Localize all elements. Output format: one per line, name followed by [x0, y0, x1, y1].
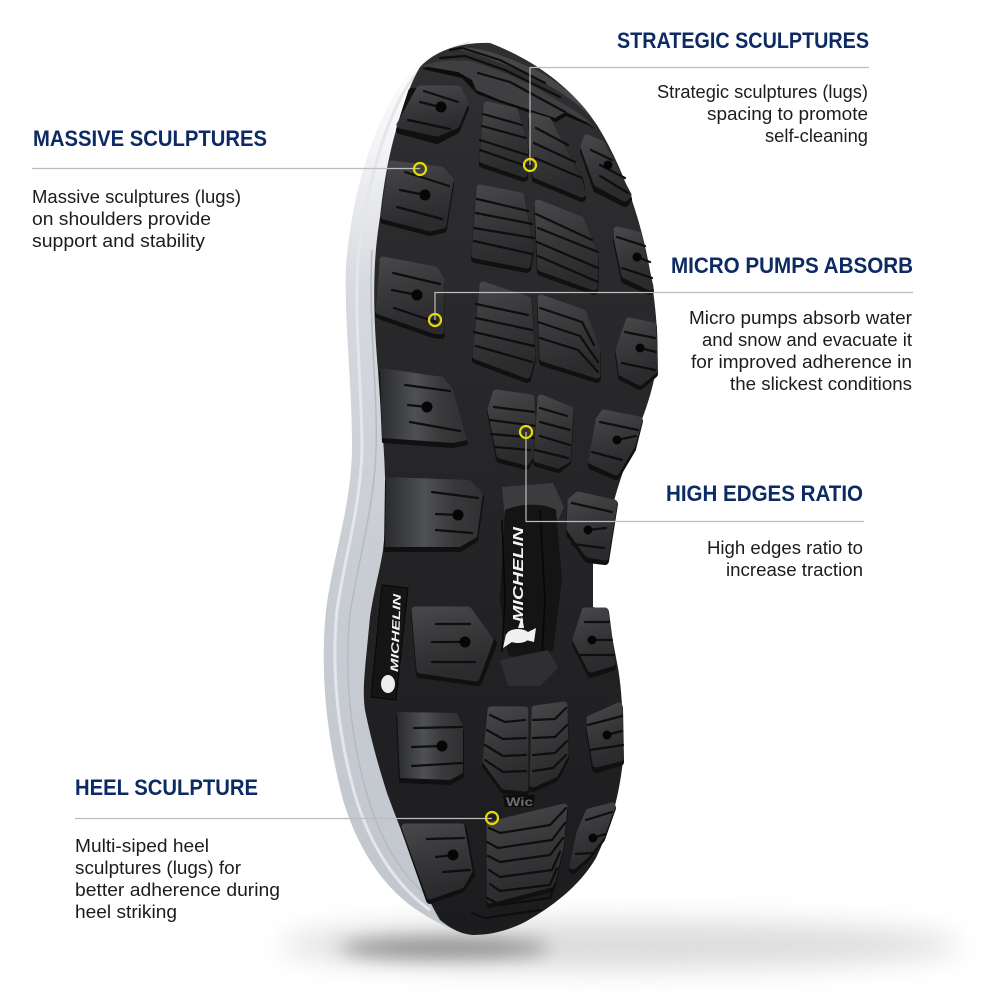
block row 5: [485, 705, 567, 792]
text block: support and stability: [32, 231, 205, 251]
lug R1: [584, 138, 628, 203]
lug R5: [570, 495, 614, 561]
text block: on shoulders provide: [32, 209, 211, 229]
leader line and marker: massive sculptures: [32, 163, 426, 175]
lug L8: [405, 827, 471, 900]
heading: HEEL SCULPTURE: [75, 775, 258, 800]
leader line and marker: micro pumps: [429, 292, 913, 326]
small side label: MICHELIN: [389, 592, 404, 672]
text block: Massive sculptures (lugs): [32, 187, 241, 207]
text block: the slickest conditions: [730, 374, 912, 394]
wic mark: [503, 795, 535, 809]
text block: [707, 538, 863, 580]
lug R6: [576, 611, 614, 674]
forefoot central blocks: [474, 105, 598, 379]
arch logo text: MICHELIN: [510, 525, 527, 622]
text block: High edges ratio to: [707, 538, 863, 558]
arch logo recess: [500, 505, 562, 662]
callout: high edges ratio: [666, 481, 863, 580]
heading: MASSIVE SCULPTURES: [33, 126, 267, 151]
text block: spacing to promote: [707, 104, 868, 124]
callout: heel sculpture: [75, 775, 280, 922]
midfoot central blocks: [371, 393, 570, 700]
callout: micro pumps absorb: [671, 253, 913, 394]
text block: and snow and evacuate it: [702, 330, 912, 350]
lug R7: [588, 706, 623, 769]
callout: strategic sculptures: [617, 28, 869, 146]
lug L2: [384, 164, 450, 232]
block row 3: [474, 285, 598, 379]
heading: STRATEGIC SCULPTURES: [617, 28, 869, 53]
lug R2: [617, 230, 652, 291]
ground shadow: [280, 921, 960, 969]
heel block: [472, 807, 566, 918]
text block: [32, 187, 241, 251]
centre tongue: [502, 483, 564, 520]
toe band: [422, 48, 595, 130]
lug R4: [592, 413, 639, 476]
text block: for improved adherence in: [691, 352, 912, 372]
block row 1: [480, 105, 582, 198]
text block: Multi-siped heel: [75, 836, 209, 856]
lug L3: [379, 260, 441, 335]
lug R3: [619, 321, 656, 386]
text block: self-cleaning: [765, 126, 868, 146]
text block: heel striking: [75, 902, 177, 922]
text block: [657, 82, 868, 146]
lower arch pad: [500, 650, 558, 686]
left shoulder lugs: [379, 89, 493, 900]
lug L6: [415, 610, 493, 682]
heading: MICRO PUMPS ABSORB: [671, 253, 913, 278]
leader line and marker: strategic sculptures: [524, 68, 869, 171]
lug L4: [380, 368, 467, 447]
leader line and marker: high edges: [520, 426, 864, 522]
block row 4: [490, 393, 570, 469]
heel central blocks: [472, 705, 567, 918]
lug R8: [573, 806, 612, 870]
block row 2: [474, 188, 598, 291]
text block: Micro pumps absorb water: [689, 308, 912, 328]
right shoulder lugs: [570, 138, 656, 870]
shoe sole illustration: [324, 40, 657, 935]
text block: increase traction: [726, 560, 863, 580]
text block: [75, 836, 280, 922]
arch logo figure: [503, 616, 536, 648]
outsole base: [364, 43, 657, 935]
heading: HIGH EDGES RATIO: [666, 481, 863, 506]
lug L7: [397, 712, 463, 784]
lug L1: [400, 89, 465, 140]
text block: [689, 308, 912, 394]
leader line and marker: heel sculpture: [75, 812, 498, 824]
small side label: [371, 585, 408, 700]
callout: massive sculptures: [32, 126, 267, 251]
text block: Strategic sculptures (lugs): [657, 82, 868, 102]
wic mark: Wic: [506, 795, 533, 809]
text block: better adherence during: [75, 880, 280, 900]
midsole: [324, 40, 500, 935]
lug L5: [385, 477, 483, 551]
text block: sculptures (lugs) for: [75, 858, 241, 878]
